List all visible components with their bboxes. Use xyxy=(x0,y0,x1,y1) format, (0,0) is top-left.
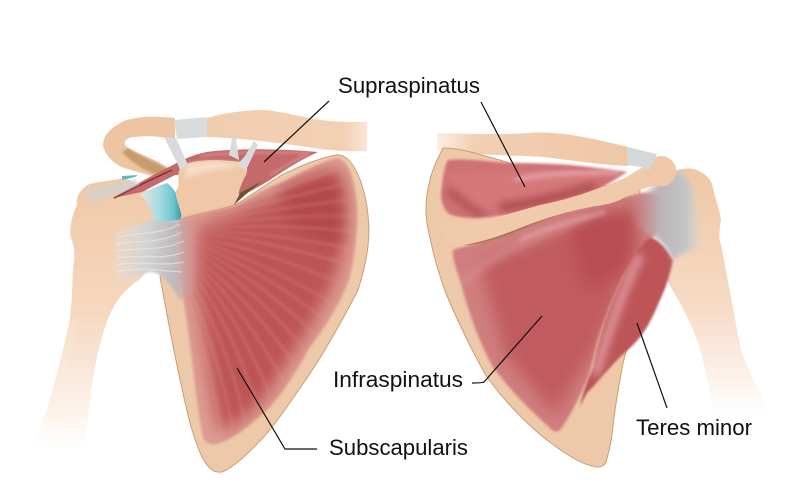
humerus (right) xyxy=(660,168,772,412)
subscapularis fibre lines xyxy=(194,172,346,422)
acromioclavicular ligament (right) xyxy=(627,147,657,170)
scapular spine shadow xyxy=(465,212,570,245)
humerus highlight xyxy=(48,320,78,420)
clavicle (right) xyxy=(437,132,628,166)
supraspinatus muscle (right) xyxy=(440,158,628,220)
shoulder anatomy diagram xyxy=(39,77,762,473)
rotator tendon (right) xyxy=(625,172,702,260)
teal cartilage xyxy=(140,183,182,222)
acromion knob xyxy=(646,156,676,186)
clavicle (left) xyxy=(207,110,367,151)
coracoid ligaments xyxy=(164,137,258,170)
scapula (left) xyxy=(160,155,369,472)
leader lines xyxy=(237,101,667,449)
label: Teres minor: Teres minor xyxy=(636,415,752,440)
humerus (left) xyxy=(32,178,175,448)
coracoid and glenoid bone xyxy=(176,160,247,218)
right view: back of shoulder xyxy=(426,132,772,467)
label: Supraspinatus: Supraspinatus xyxy=(338,73,480,98)
tendon over humeral head xyxy=(85,179,140,202)
left view: front of shoulder xyxy=(32,110,370,472)
supraspinatus muscle (left) xyxy=(113,149,318,198)
scapula (right) xyxy=(426,148,640,467)
subscapularis muscle xyxy=(178,157,358,446)
teres minor muscle xyxy=(579,236,674,406)
scapular spine and acromion xyxy=(440,158,676,247)
acromion hook xyxy=(103,117,175,176)
label: Infraspinatus: Infraspinatus xyxy=(333,367,463,392)
acromioclavicular ligament xyxy=(174,117,207,139)
infraspinatus muscle xyxy=(452,192,658,433)
label: Subscapularis: Subscapularis xyxy=(329,435,468,460)
subscapularis tendon xyxy=(115,218,200,300)
